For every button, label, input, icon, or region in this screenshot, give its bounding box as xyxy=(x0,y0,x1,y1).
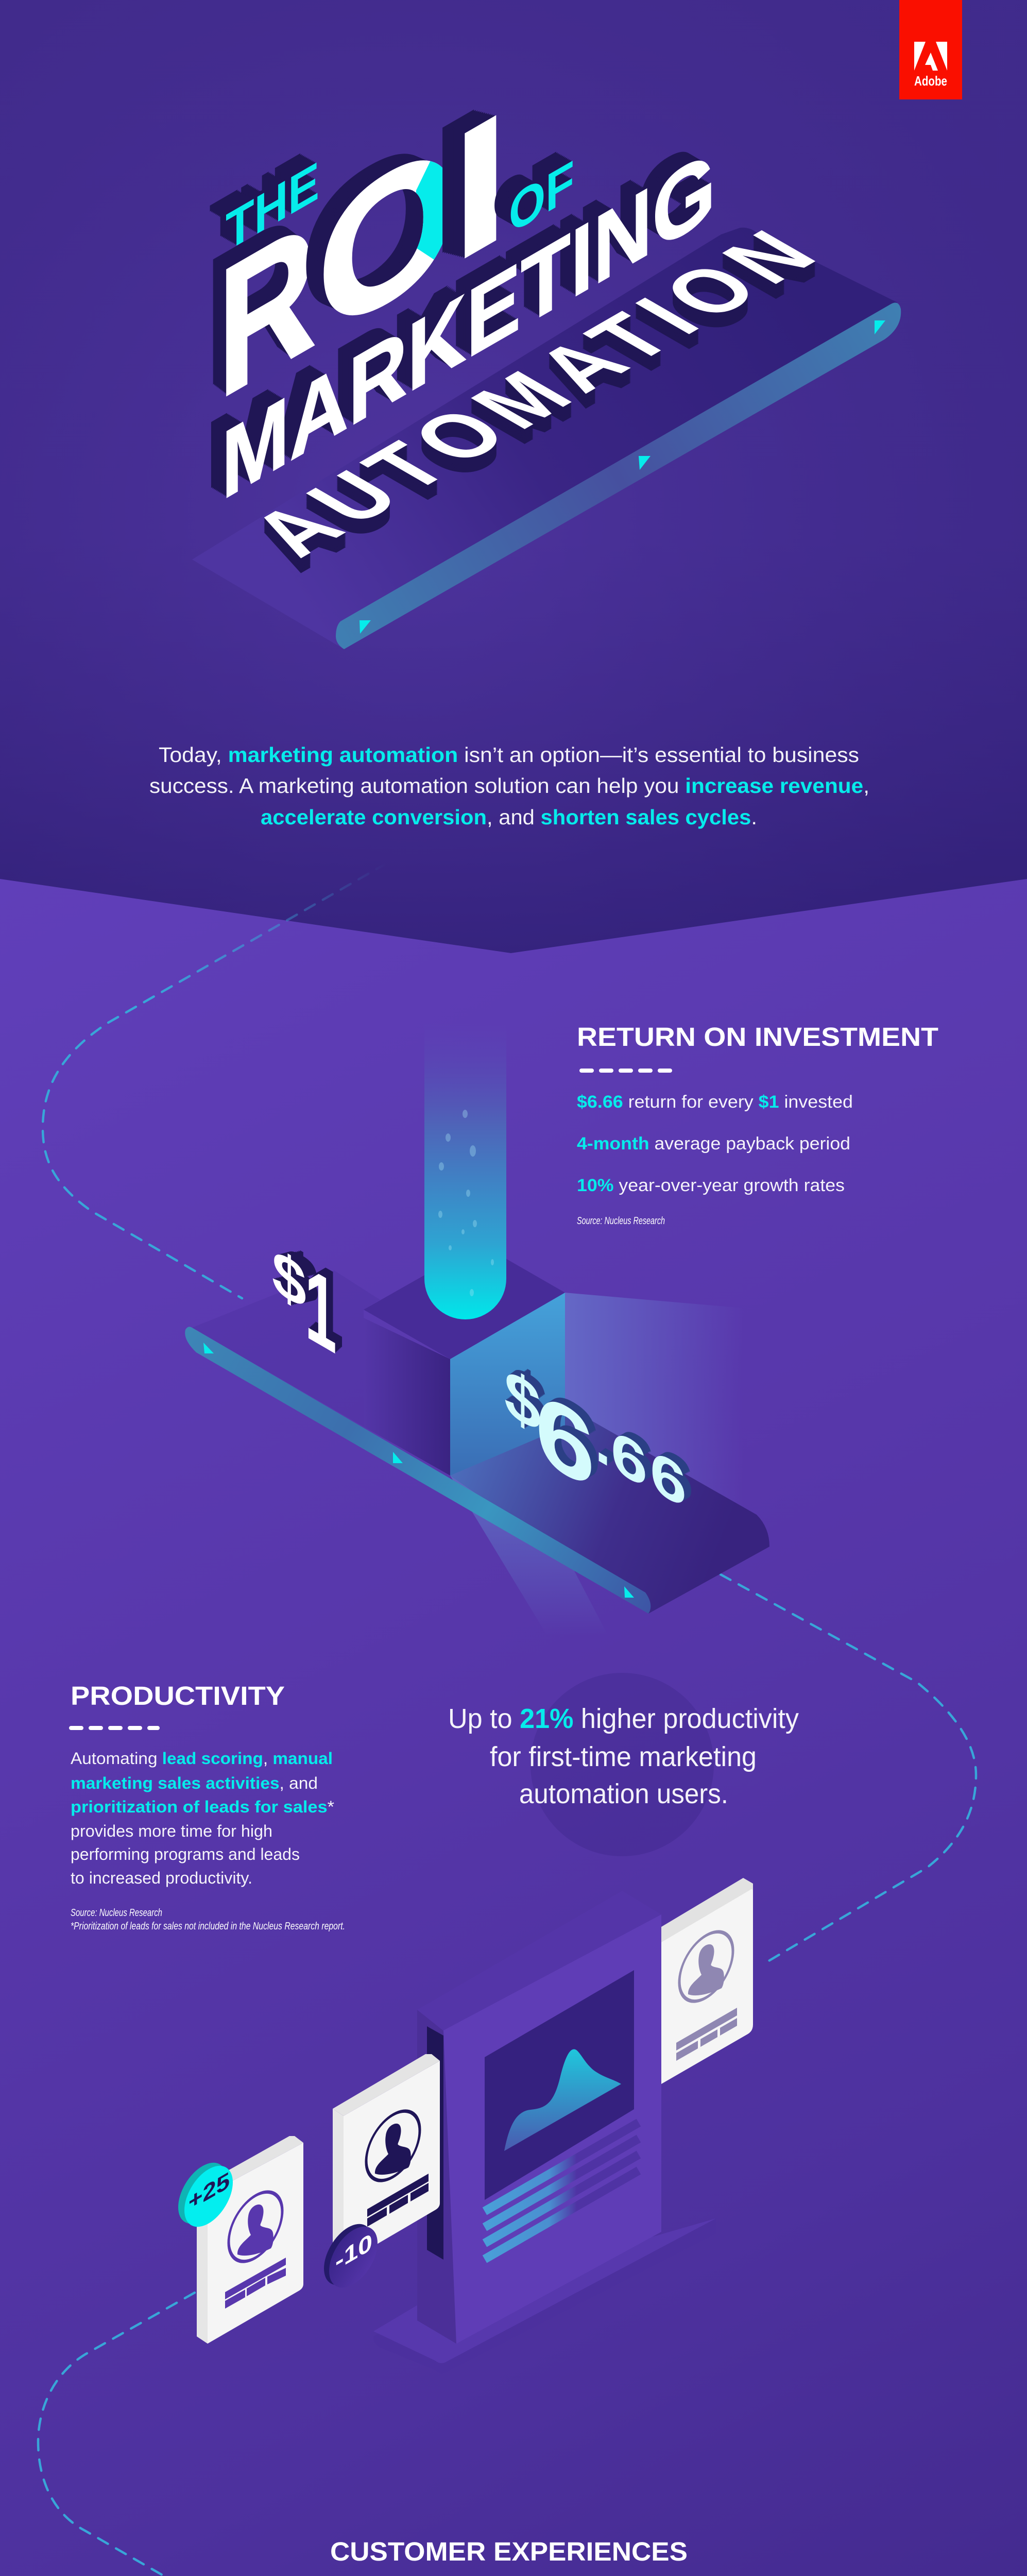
illustration: title conveyor belt xyxy=(192,228,901,649)
whole dollars: 6 xyxy=(535,1368,595,1512)
monitor top xyxy=(417,1891,661,2032)
dollar sign: $ xyxy=(272,1234,306,1324)
decimal point: . xyxy=(595,1406,611,1480)
card: left profile xyxy=(197,2136,303,2344)
monitor screen xyxy=(485,1970,634,2200)
title word: O: O xyxy=(317,95,459,380)
decorative circles behind callouts xyxy=(105,1673,913,2576)
text: productivity paragraph: performing programs and leads xyxy=(71,1845,300,1863)
area chart on screen xyxy=(504,2049,621,2151)
text: ROI stats: 10% year-over-year growth rates xyxy=(577,1176,845,1195)
icon: Adobe red tab logo xyxy=(899,0,962,99)
monitor text bars xyxy=(485,2123,639,2259)
text: intro paragraph: Today, marketing automation isn’t an option—it’s essential to business xyxy=(159,743,859,767)
icon: +25 badge: +25 xyxy=(189,2167,230,2216)
belt front band xyxy=(185,1327,651,1614)
text: productivity paragraph: marketing sales activities , and xyxy=(71,1774,318,1792)
glowing tube xyxy=(424,1018,506,1319)
text: productivity paragraph: prioritization of leads for sales * xyxy=(71,1798,334,1816)
card: right profile xyxy=(661,1878,753,2084)
icon: +25 badge xyxy=(178,2152,233,2238)
text: ROI stats: 4-month average payback period xyxy=(577,1134,850,1154)
title word: Automation: AUTOMATION xyxy=(229,214,845,569)
light beam from block xyxy=(565,1293,743,1535)
column right face xyxy=(450,1293,565,1476)
text: ROI stats: Source: Nucleus Research xyxy=(577,1215,665,1227)
label: $6.66 xyxy=(504,1353,691,1521)
label: $1 xyxy=(272,1234,342,1376)
text: ROI stats xyxy=(577,1092,853,1227)
arrow: dashed connector path xyxy=(38,863,986,2576)
cents second digit: 6 xyxy=(650,1436,687,1521)
monitor front xyxy=(443,1914,661,2344)
monitor left face xyxy=(417,2010,456,2344)
heading: return on investment: RETURN ON INVESTMENT xyxy=(577,1022,938,1052)
text: 21% callout xyxy=(448,1703,799,1809)
title accent: O wedge: O xyxy=(317,95,459,380)
icon: -10 badge: -10 xyxy=(335,2228,372,2276)
column top xyxy=(364,1244,565,1359)
dollar sign: $ xyxy=(504,1353,541,1448)
illustration: monitor xyxy=(373,1891,716,2374)
heading: customer experiences: CUSTOMER EXPERIENCES xyxy=(330,2537,688,2566)
icon: -10 badge xyxy=(324,2213,378,2298)
text: 21% callout: for first-time marketing xyxy=(490,1741,757,1772)
illustration: ROI machine xyxy=(185,1018,769,1635)
text: ROI stats: $6.66 return for every $1 invested xyxy=(577,1092,853,1112)
text: productivity paragraph: provides more time for high xyxy=(71,1822,272,1840)
text: productivity paragraph: Automating lead scoring, manual xyxy=(71,1749,333,1768)
cents first digit: 6 xyxy=(611,1416,647,1501)
text: 21% callout: automation users. xyxy=(519,1778,728,1809)
text: intro paragraph: success. A marketing automation solution can help you increase revenue , xyxy=(149,774,869,798)
monitor slot xyxy=(427,2026,443,2260)
icon: Adobe red tab logo: Adobe xyxy=(914,73,947,89)
text: productivity paragraph: *Prioritization of leads for sales not included in the Nucleus Research report. xyxy=(71,1921,345,1932)
text: productivity paragraph xyxy=(71,1749,345,1932)
column left face xyxy=(364,1318,450,1476)
title word: Marketing: MARKETING xyxy=(221,129,716,521)
heading: productivity: PRODUCTIVITY xyxy=(71,1681,285,1710)
light beam below belt xyxy=(450,1476,608,1635)
left belt plate xyxy=(192,1270,380,1427)
text: 21% callout: Up to 21% higher productivity xyxy=(448,1703,799,1734)
digit one: 1 xyxy=(305,1244,337,1376)
title word: R: R xyxy=(218,179,316,439)
card: middle profile xyxy=(333,2054,440,2264)
title word: The: THE xyxy=(226,150,319,264)
background: main chevron panel xyxy=(0,879,1027,2576)
belt surface right xyxy=(450,1386,769,1614)
text: productivity paragraph: Source: Nucleus Research xyxy=(71,1907,162,1919)
monitor base xyxy=(373,2218,716,2374)
text: intro paragraph: accelerate conversion, and shorten sales cycles. xyxy=(261,805,757,829)
title: The ROI of Marketing Automation xyxy=(210,67,845,573)
text: intro paragraph xyxy=(149,743,869,829)
text: productivity paragraph: to increased productivity. xyxy=(71,1869,252,1887)
title word: I: I xyxy=(450,67,511,306)
title word: Of: OF xyxy=(509,149,574,246)
